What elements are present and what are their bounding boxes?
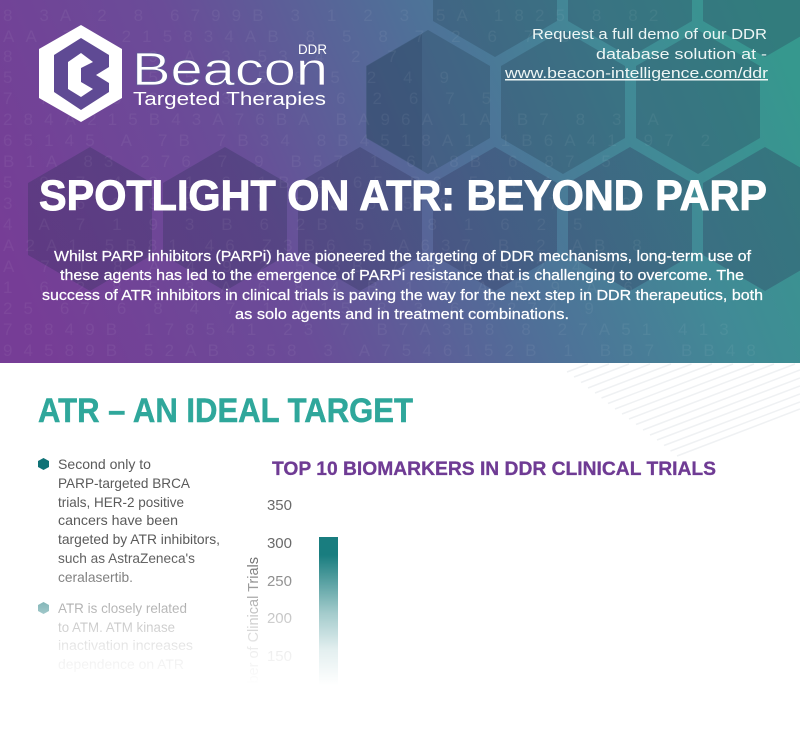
- intro paragraph: [42, 248, 763, 323]
- digit pattern: 8 6 4 8 9 A 3 53 4 2 7: [3, 47, 408, 66]
- icon: teal hexagon bullet: [38, 458, 49, 470]
- bullet 1: targeted by ATR inhibitors,: [58, 531, 220, 547]
- decorative stripes: [567, 364, 800, 456]
- bullet 2: to ATM. ATM kinase: [58, 619, 175, 635]
- y axis labels: 200: [267, 610, 292, 627]
- digit pattern: [3, 6, 767, 360]
- digit pattern: 4 A 7 1 9 3 B 6 2B 5 A 8 1 6 2 5: [3, 215, 594, 234]
- y axis labels: 150: [267, 648, 292, 665]
- demo request text: [504, 26, 768, 82]
- intro paragraph: Whilst PARP inhibitors (PARPi) have pioneered the targeting of DDR mechanisms, long-term use of: [54, 248, 752, 265]
- chart: top 10 biomarkers: [246, 458, 716, 714]
- bullet list: [38, 456, 220, 672]
- bullet 1: cancers have been: [58, 512, 178, 528]
- demo request text: Request a full demo of our DDR: [532, 26, 767, 43]
- chart title: TOP 10 BIOMARKERS IN DDR CLINICAL TRIALS: [272, 458, 716, 480]
- panel: header banner: [0, 0, 800, 363]
- demo request text: www.beacon-intelligence.com/ddr: [504, 65, 768, 82]
- bar: [319, 537, 338, 690]
- digit pattern: 3 8 6 2 9 5 A 8 7 3 6 5 8 4 2 7 A 9: [3, 194, 642, 213]
- digit pattern: A 7 1 8 A 4 9 2 5 3B 7 8 6 9 2 4 7: [3, 257, 629, 276]
- intro paragraph: as solo agents and in treatment combinations.: [235, 306, 569, 323]
- bullet 2: [38, 600, 193, 672]
- intro paragraph: success of ATR inhibitors in clinical trials is paving the way for the next step in DDR therapeutics, both: [42, 287, 763, 304]
- digit pattern: 78849B 178541 23 7 B7A3B8 8 27A51 413: [3, 320, 740, 339]
- y axis labels: [267, 497, 292, 665]
- digit pattern: 5 9 7 4 2 1 6 1B 2 65 B6 5 A 4: [3, 173, 562, 192]
- tagline: Targeted Therapies: Targeted Therapies: [133, 88, 326, 109]
- y axis labels: 250: [267, 573, 292, 590]
- digit pattern: 7 7 4 9 8 6 3 7 A16 2 6 7 5: [3, 89, 502, 108]
- digit pattern: 5 2 7 1 5 5 2 5 8 5 2 4 9: [3, 68, 460, 87]
- digit pattern: B1A 83 276 7 9 B57 1 6A8B 6 87 5: [3, 152, 622, 171]
- bullet 1: ceralasertib.: [58, 569, 133, 585]
- digit pattern: 1 6 2 8 5 3 A 6 8 4 B 1 7 A 5 9 A 6: [3, 278, 644, 297]
- bullet 2: dependence on ATR: [58, 656, 184, 672]
- wordmark: DDR: DDR: [298, 42, 327, 57]
- bullet 1: such as AstraZeneca's: [58, 550, 195, 566]
- digit pattern: A2A1 5B81 46 Z3B6 5 A637 B 2 AB 8: [3, 236, 653, 255]
- bullet 1: trials, HER-2 positive: [58, 494, 184, 510]
- bullet 1: Second only to: [58, 456, 151, 472]
- icon: hexagon B: [39, 25, 122, 122]
- y axis labels: 350: [267, 497, 292, 514]
- digit pattern: 65145 A 7B 7B34 8B4518A1 1B6A41 97 2: [3, 131, 721, 150]
- intro paragraph: these agents has led to the emergence of PARPi resistance that is challenging to overcome. The: [60, 267, 744, 284]
- bullet 2: inactivation increases: [58, 637, 193, 653]
- bottom fade overlay: [0, 555, 800, 685]
- title: SPOTLIGHT ON ATR: BEYOND PARP: [39, 172, 767, 220]
- bullet 1: PARP-targeted BRCA: [58, 475, 191, 491]
- y axis labels: 300: [267, 535, 292, 552]
- y axis title: Number of Clinical Trials: [246, 557, 262, 714]
- bullet 1: [38, 456, 220, 585]
- icon: teal hexagon bullet: [38, 602, 49, 614]
- bullet 2: ATR is closely related: [58, 600, 187, 616]
- logo: Beacon Targeted Therapies: [39, 25, 328, 122]
- digit pattern: 25 67 6 8 4 7 1 A15 8 3 6 2274 9: [3, 299, 605, 318]
- hexagon pattern: [28, 0, 800, 291]
- wordmark: Beacon: Beacon: [132, 43, 328, 95]
- digit pattern: AA 7B 215834AB 8 5 8 7 2 6 7 5: [3, 27, 581, 46]
- digit pattern: 8 3A 2 8 6799B 3 1 2 3 5A 1825 8 82: [3, 6, 669, 25]
- heading: ATR - an ideal target: ATR – AN IDEAL TARGET: [38, 392, 413, 430]
- digit pattern: 284A215B43A76BA BA96A 1A B7 8 3 A: [3, 110, 670, 129]
- demo request text: database solution at -: [596, 46, 767, 63]
- digit pattern: 94589B 52AB 358 3 A7546152B 1 BB7 BB48: [3, 341, 767, 360]
